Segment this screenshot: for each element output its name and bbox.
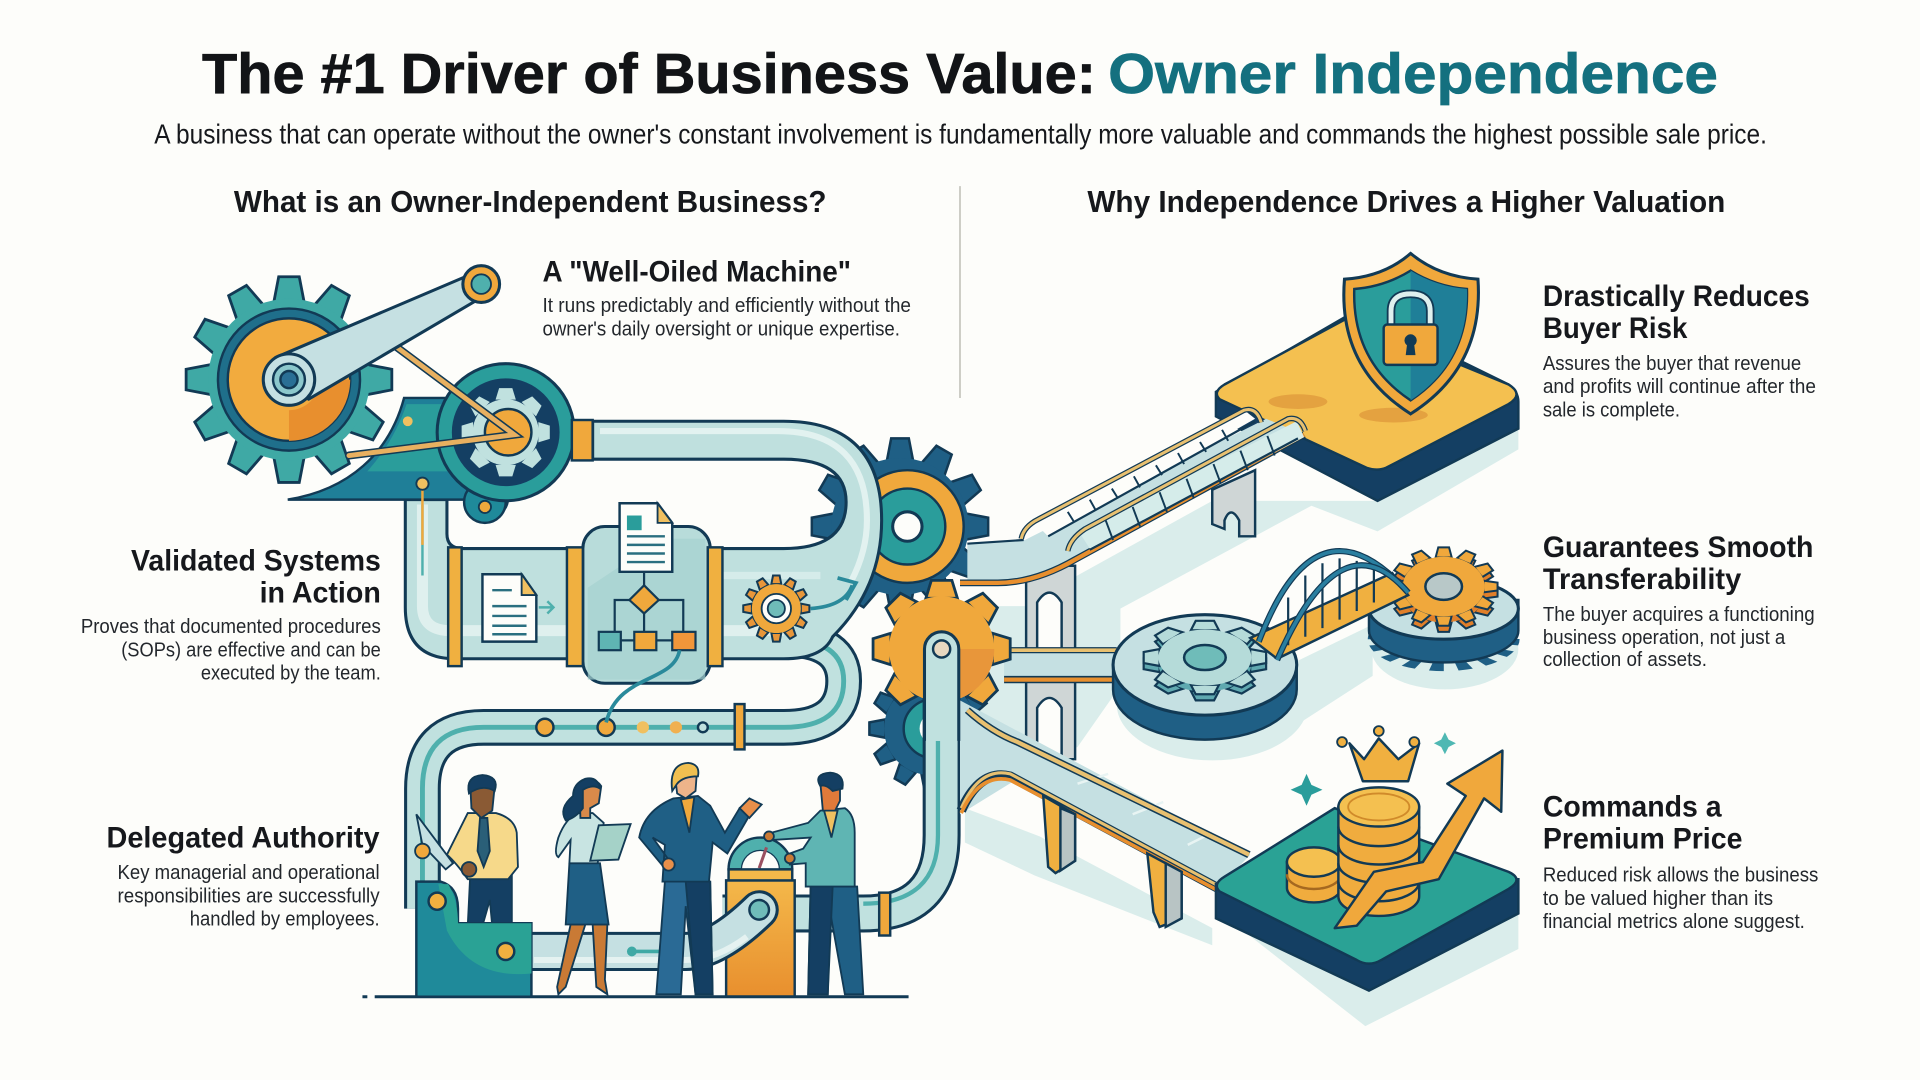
crown — [1337, 726, 1419, 781]
pillars: lower road — [1043, 796, 1182, 927]
crank arm — [263, 266, 500, 405]
tank with flowchart — [583, 503, 710, 722]
machine: bracket and second wheel — [288, 364, 574, 545]
person: woman — [556, 778, 631, 994]
text: premium price: Premium Price — [1543, 823, 1742, 856]
platform: disc with gear — [1113, 615, 1297, 740]
text: well-oiled machine: A "Well-Oiled Machine" — [542, 256, 851, 289]
pipe: right vertical pipe — [722, 649, 942, 913]
gear: blue gear lower — [869, 667, 992, 790]
bottom pipe and orange machine — [726, 838, 795, 997]
small orange gear — [743, 576, 809, 642]
sparkle left — [1291, 774, 1322, 806]
pillar: top right — [1212, 470, 1255, 536]
text: premium price: to be valued higher than its — [1543, 888, 1773, 910]
flange: lower pipe — [735, 704, 744, 749]
text: validated systems: executed by the team. — [201, 663, 381, 685]
text: well-oiled machine — [542, 256, 911, 341]
flange: top pipe — [572, 420, 593, 460]
text: delegated authority — [107, 821, 380, 931]
text: smooth transferability — [1543, 531, 1815, 671]
bridge: top road — [960, 409, 1305, 583]
machine: teal block — [416, 882, 531, 997]
text: validated systems: (SOPs) are effective and can be — [121, 639, 381, 661]
text: validated systems — [81, 545, 381, 685]
text: well-oiled machine: It runs predictably and efficiently without the — [542, 295, 911, 317]
gear: blue gear behind pipes — [812, 438, 988, 615]
heading: right column: Why Independence Drives a Higher Valuation — [1087, 185, 1725, 219]
pipe: bottom horizontal — [531, 900, 769, 960]
text: smooth transferability: Transferability — [1543, 563, 1742, 596]
document left — [482, 574, 553, 642]
text: premium price: Reduced risk allows the business — [1543, 865, 1818, 887]
text: smooth transferability: Guarantees Smooth — [1543, 531, 1813, 564]
text: reduces buyer risk: Assures the buyer that revenue — [1543, 353, 1801, 375]
pipe: top pipe merging into wide middle pipe — [405, 421, 882, 659]
text: delegated authority: responsibilities are successfully — [118, 885, 380, 907]
flange: right pipe — [879, 893, 890, 936]
person: man in teal jacket — [764, 773, 863, 994]
text: premium price — [1543, 791, 1818, 933]
text: reduces buyer risk: and profits will continue after the — [1543, 376, 1816, 398]
coins — [1287, 787, 1419, 916]
text: smooth transferability: business operation, not just a — [1543, 627, 1786, 649]
flowchart — [599, 572, 696, 650]
growth arrow — [1335, 751, 1502, 928]
text: reduces buyer risk: sale is complete. — [1543, 399, 1680, 421]
text: smooth transferability: collection of assets. — [1543, 649, 1707, 671]
text: delegated authority: Delegated Authority — [107, 821, 380, 854]
text: delegated authority: handled by employees. — [190, 909, 380, 931]
text: reduces buyer risk: Buyer Risk — [1543, 312, 1688, 345]
ground line — [362, 995, 909, 998]
platform: blue gear base — [1369, 578, 1518, 666]
text: validated systems: Validated Systems — [131, 545, 381, 578]
text: premium price: financial metrics alone suggest. — [1543, 911, 1805, 933]
text: delegated authority: Key managerial and operational — [118, 862, 380, 884]
platform: teal — [1216, 808, 1518, 991]
heading: left column: What is an Owner-Independent Business? — [234, 185, 827, 219]
pipe dots — [536, 719, 708, 736]
pillar: top left — [1026, 566, 1075, 759]
shield with lock — [1344, 253, 1478, 414]
orange gear on platform — [1390, 547, 1498, 632]
title: Owner Independence — [1108, 42, 1718, 105]
text: validated systems: Proves that documented procedures — [81, 616, 381, 638]
belts — [349, 345, 514, 456]
person: left man — [415, 775, 518, 926]
document on tank — [620, 503, 672, 572]
flanges — [448, 547, 722, 666]
text: smooth transferability: The buyer acquires a functioning — [1543, 604, 1815, 626]
title — [202, 42, 1718, 105]
pipe: lower winding pipe — [422, 639, 844, 909]
big teal gear — [186, 277, 392, 482]
floor shadows — [965, 429, 1518, 1026]
sparkle right — [1434, 732, 1456, 754]
teal flow arrow — [811, 578, 856, 609]
bridge: lower road — [960, 700, 1250, 891]
orange gear with arm — [873, 580, 1010, 741]
title: The #1 Driver of Business Value: — [202, 42, 1096, 105]
platform: gold — [1216, 313, 1518, 501]
text: reduces buyer risk: Drastically Reduces — [1543, 280, 1810, 313]
text: validated systems: in Action — [260, 576, 381, 609]
arch bridge — [1250, 551, 1408, 660]
person: man in suit — [639, 763, 762, 994]
text: well-oiled machine: owner's daily oversight or unique expertise. — [542, 319, 900, 341]
connector road to gear disc — [1004, 650, 1117, 680]
text: premium price: Commands a — [1543, 791, 1722, 824]
text: reduces buyer risk — [1543, 280, 1816, 421]
